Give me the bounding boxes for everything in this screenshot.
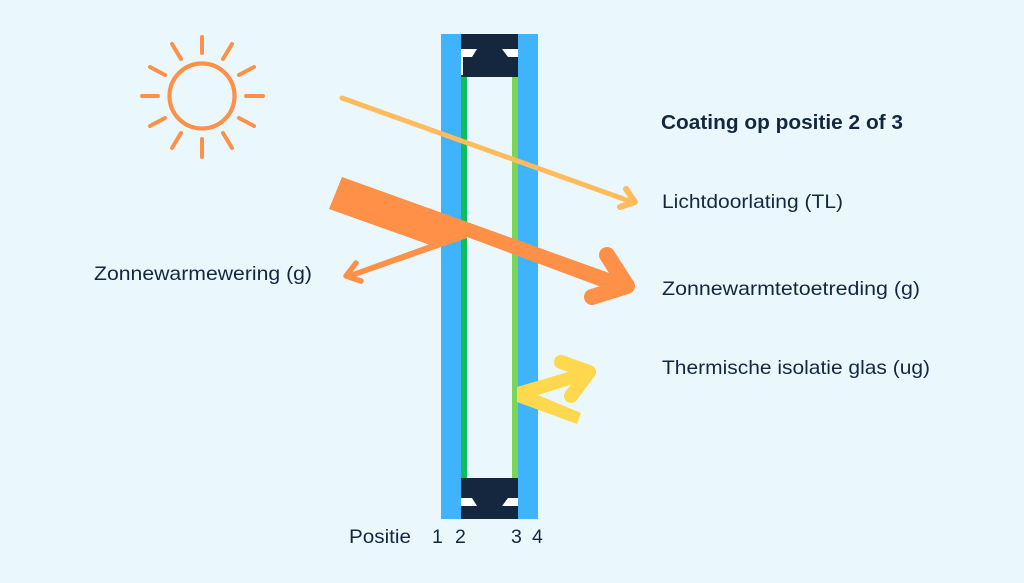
- icon: sun: [142, 37, 263, 157]
- top spacer: [461, 34, 518, 77]
- label: solar heat gain: Zonnewarmtetoetreding (g): [662, 278, 920, 300]
- arrow: solar reflection: [346, 236, 467, 281]
- glazing unit diagram: [441, 34, 538, 519]
- left glass pane: [441, 34, 461, 519]
- bottom spacer: [461, 478, 518, 519]
- arrow: thermal insulation: [517, 362, 592, 424]
- coating position 3: [512, 77, 518, 478]
- position labels: [349, 526, 543, 548]
- label: thermal insulation: Thermische isolatie glas (ug): [662, 357, 930, 379]
- right glass pane: [518, 34, 538, 519]
- label: light transmission: Lichtdoorlating (TL): [662, 191, 843, 213]
- label: solar reflection: Zonnewarmewering (g): [94, 263, 312, 285]
- heading: Coating op positie 2 of 3: [661, 112, 903, 134]
- position labels: 3: [511, 526, 522, 548]
- position labels: 2: [455, 526, 466, 548]
- arrow: light transmission: [342, 98, 635, 207]
- position labels: 1: [432, 526, 443, 548]
- coating position 2: [461, 77, 467, 478]
- position labels: Positie: [349, 526, 411, 548]
- position labels: 4: [532, 526, 543, 548]
- arrow: solar heat gain: [329, 177, 627, 297]
